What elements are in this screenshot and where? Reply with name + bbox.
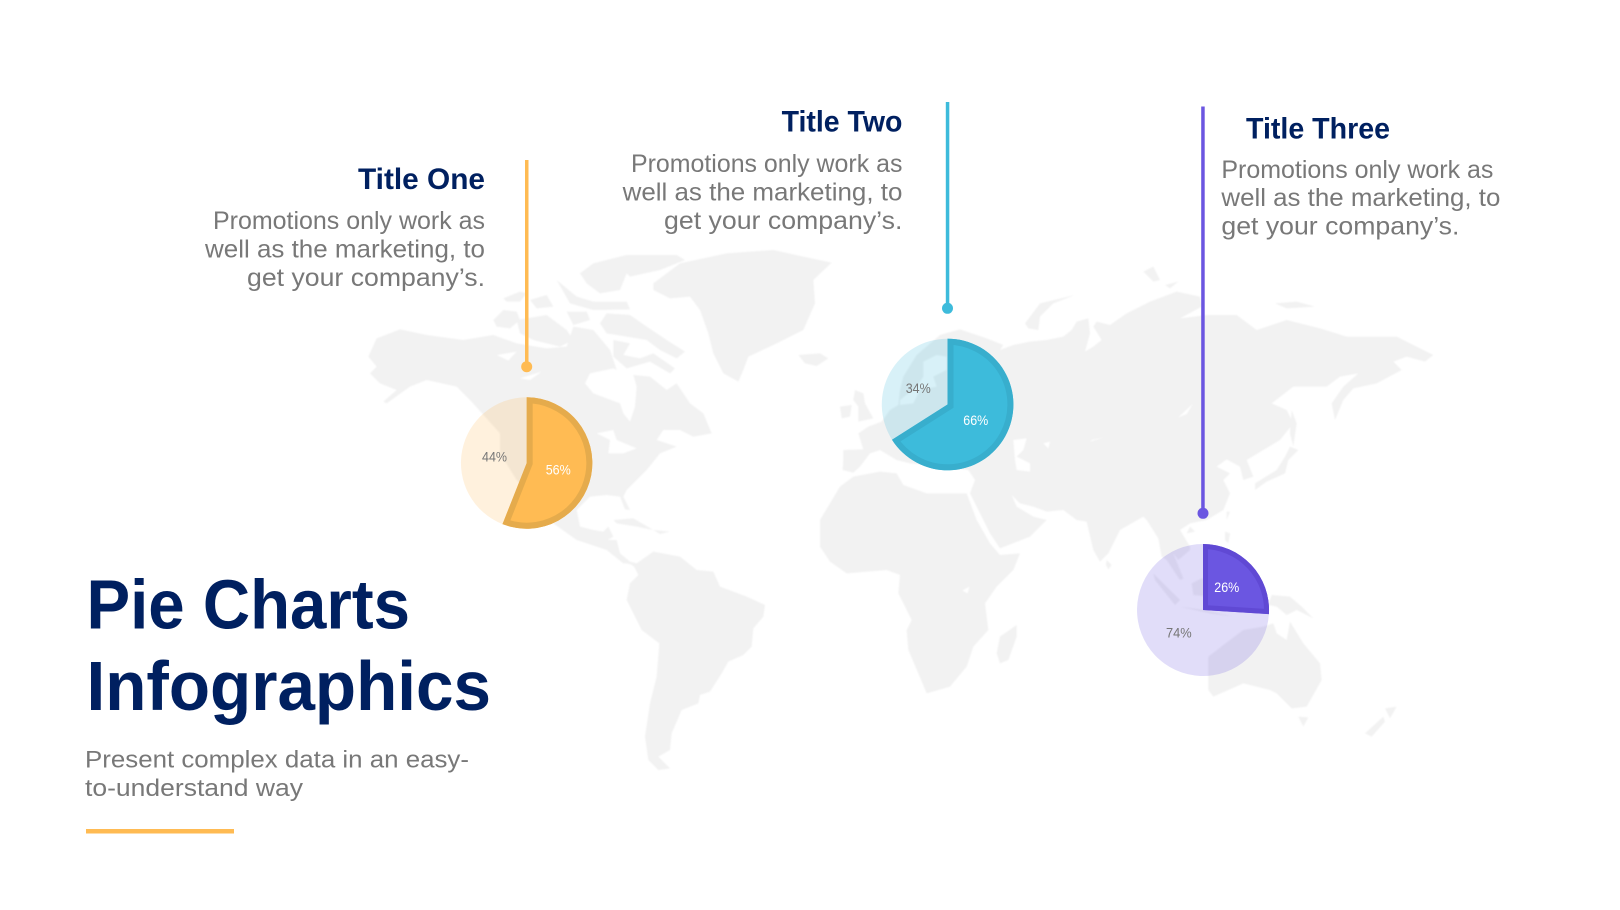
body text: title two: get your company’s. [664,207,902,235]
main title [86,566,491,725]
body text: title three: Promotions only work as [1221,156,1493,184]
heading: title one: Title One [358,163,485,196]
body text: title two: Promotions only work as [631,150,902,178]
body text: title two: well as the marketing, to [622,178,902,206]
callout: title one [204,160,592,529]
body text: title three: get your company’s. [1221,213,1459,241]
main title: Infographics [86,647,491,725]
pointer line: purple [1198,106,1208,519]
pie chart: 66 / 34 [882,339,1013,470]
body text: title three: well as the marketing, to [1220,184,1500,212]
pie chart: 26 / 74: 26% [1214,579,1239,595]
Eurasia and Africa [820,292,1433,693]
pointer line: blue [942,102,953,314]
subtitle [85,746,469,802]
callout: title two [622,102,1013,470]
pie chart: 26 / 74: 74% [1166,625,1192,641]
subtitle: Present complex data in an easy- [85,746,469,774]
pie chart: 56 / 44: 56% [546,461,571,477]
body text: title one: well as the marketing, to [204,236,485,264]
pointer line: orange [521,160,532,372]
pie chart: 56 / 44: 44% [482,449,507,465]
pie chart: 56 / 44 [461,397,592,529]
pie chart: 66 / 34: 66% [963,412,988,428]
body text: title one: get your company’s. [247,264,485,292]
heading: title three: Title Three [1246,112,1390,145]
North America and arctic islands [368,250,832,568]
world map background [368,250,1433,770]
subtitle: to-understand way [85,775,303,802]
Arctic Russia, Japan and Pacific islands [1025,267,1315,533]
pie chart: 26 / 74 [1137,544,1269,676]
body text: title one: Promotions only work as [213,207,485,235]
callout: title three [1137,106,1500,676]
Southeast Asia and Oceania [1153,532,1397,737]
body text: title one [204,207,485,292]
body text: title two [622,150,902,235]
accent underline [86,829,234,834]
pie chart: 66 / 34: 34% [906,380,931,396]
heading: title two: Title Two [782,105,902,138]
body text: title three [1220,156,1500,241]
South America [600,540,765,770]
main title: Pie Charts [86,566,410,644]
